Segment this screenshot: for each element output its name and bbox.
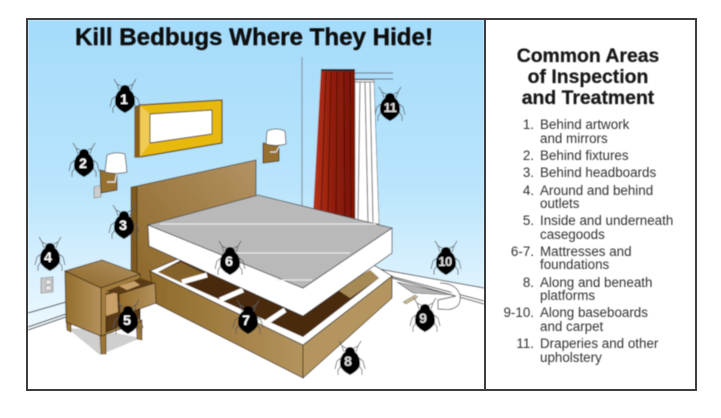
item 9-10: Along baseboards bbox=[540, 305, 648, 320]
bug 7: 7 bbox=[242, 312, 250, 328]
bug 11 bbox=[375, 87, 405, 121]
item 1: 1. bbox=[523, 117, 534, 132]
item 5: casegoods bbox=[540, 227, 605, 242]
bug 4: 4 bbox=[44, 249, 52, 265]
left baseboard bbox=[28, 302, 66, 330]
bug 4 bbox=[35, 237, 65, 271]
item 4 bbox=[523, 183, 653, 211]
item 5 bbox=[523, 213, 673, 242]
item 8 bbox=[523, 275, 652, 303]
wall lamp right bbox=[263, 129, 286, 163]
item 8: 8. bbox=[523, 275, 534, 290]
drapery: white curtain and rod bbox=[355, 73, 393, 224]
item 3: Behind headboards bbox=[540, 165, 656, 180]
item 8: Along and beneath bbox=[540, 275, 652, 290]
wall bbox=[28, 20, 484, 389]
item 9-10: and carpet bbox=[540, 319, 604, 334]
mattress bbox=[148, 195, 392, 316]
title: Kill Bedbugs Where They Hide! bbox=[75, 24, 433, 51]
item 11: 11. bbox=[516, 336, 534, 351]
item 6-7: foundations bbox=[540, 257, 610, 272]
room corner line bbox=[301, 57, 303, 206]
item 1: Behind artwork bbox=[540, 117, 630, 132]
item 6-7: 6-7. bbox=[511, 244, 534, 259]
right baseboard bbox=[370, 268, 484, 304]
heading: common areas: and Treatment bbox=[522, 87, 655, 109]
item 11 bbox=[516, 336, 659, 365]
item 5: 5. bbox=[523, 213, 534, 228]
item 3: 3. bbox=[523, 165, 534, 180]
bug 8: 8 bbox=[344, 353, 352, 369]
item 2: 2. bbox=[523, 148, 534, 163]
bug 10: 10 bbox=[438, 254, 452, 269]
bug 2 bbox=[69, 143, 99, 177]
bug 3: 3 bbox=[119, 217, 127, 233]
bug 5 bbox=[113, 300, 143, 334]
item 5: Inside and underneath bbox=[540, 213, 673, 228]
bug 6 bbox=[215, 241, 245, 275]
bug 10 bbox=[431, 241, 461, 275]
headboard bbox=[131, 160, 256, 300]
item 1: and mirrors bbox=[540, 131, 608, 146]
bug 7 bbox=[233, 300, 263, 334]
item 6-7: Mattresses and bbox=[540, 244, 632, 259]
floor bbox=[28, 268, 484, 389]
item 9-10: 9-10. bbox=[503, 305, 534, 320]
item 8: platforms bbox=[540, 288, 595, 303]
heading: common areas: Common Areas bbox=[517, 45, 659, 67]
bug 9 bbox=[410, 298, 440, 332]
bug 3 bbox=[109, 205, 139, 239]
bug 1: 1 bbox=[120, 91, 128, 107]
bug 8 bbox=[335, 341, 365, 375]
item 6-7 bbox=[511, 244, 632, 272]
bug 11: 11 bbox=[384, 100, 397, 115]
platform base bbox=[150, 258, 392, 378]
item 4: 4. bbox=[523, 183, 534, 198]
bug 1 bbox=[110, 79, 140, 113]
bug 2: 2 bbox=[79, 155, 87, 171]
carpet peeled back with arrow bbox=[397, 282, 460, 310]
item 1 bbox=[523, 117, 630, 146]
item 9-10 bbox=[503, 305, 648, 334]
panel: illustration bbox=[28, 20, 484, 389]
list of inspection areas bbox=[503, 117, 673, 365]
item 4: outlets bbox=[540, 196, 580, 211]
item 11: Draperies and other bbox=[540, 336, 659, 351]
heading: common areas: of Inspection bbox=[528, 66, 648, 88]
drapery: red curtain bbox=[313, 70, 355, 222]
bug 5: 5 bbox=[123, 312, 131, 328]
item 4: Around and behind bbox=[540, 183, 653, 198]
heading: common areas bbox=[517, 45, 659, 109]
bug 9: 9 bbox=[419, 310, 427, 326]
nightstand bbox=[65, 260, 156, 355]
wall lamp left bbox=[94, 153, 127, 198]
artwork frame bbox=[135, 100, 222, 157]
item 2: Behind fixtures bbox=[540, 148, 629, 163]
outlet bbox=[41, 277, 53, 293]
bug 6: 6 bbox=[225, 253, 233, 269]
item 11: upholstery bbox=[540, 350, 602, 365]
